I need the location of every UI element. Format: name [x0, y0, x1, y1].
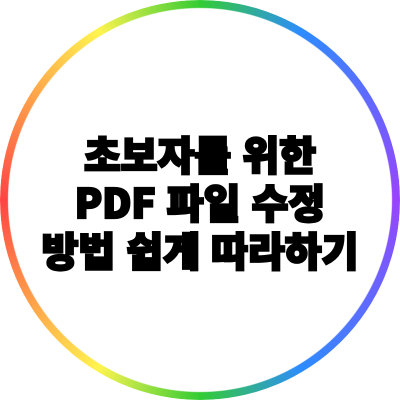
title line 2: PDF 파일 수정 — [75, 172, 325, 230]
title line 3: 방법 쉽게 따라하기 — [42, 220, 358, 278]
title — [42, 124, 358, 278]
title line 1: 초보자를 위한 — [84, 124, 316, 182]
